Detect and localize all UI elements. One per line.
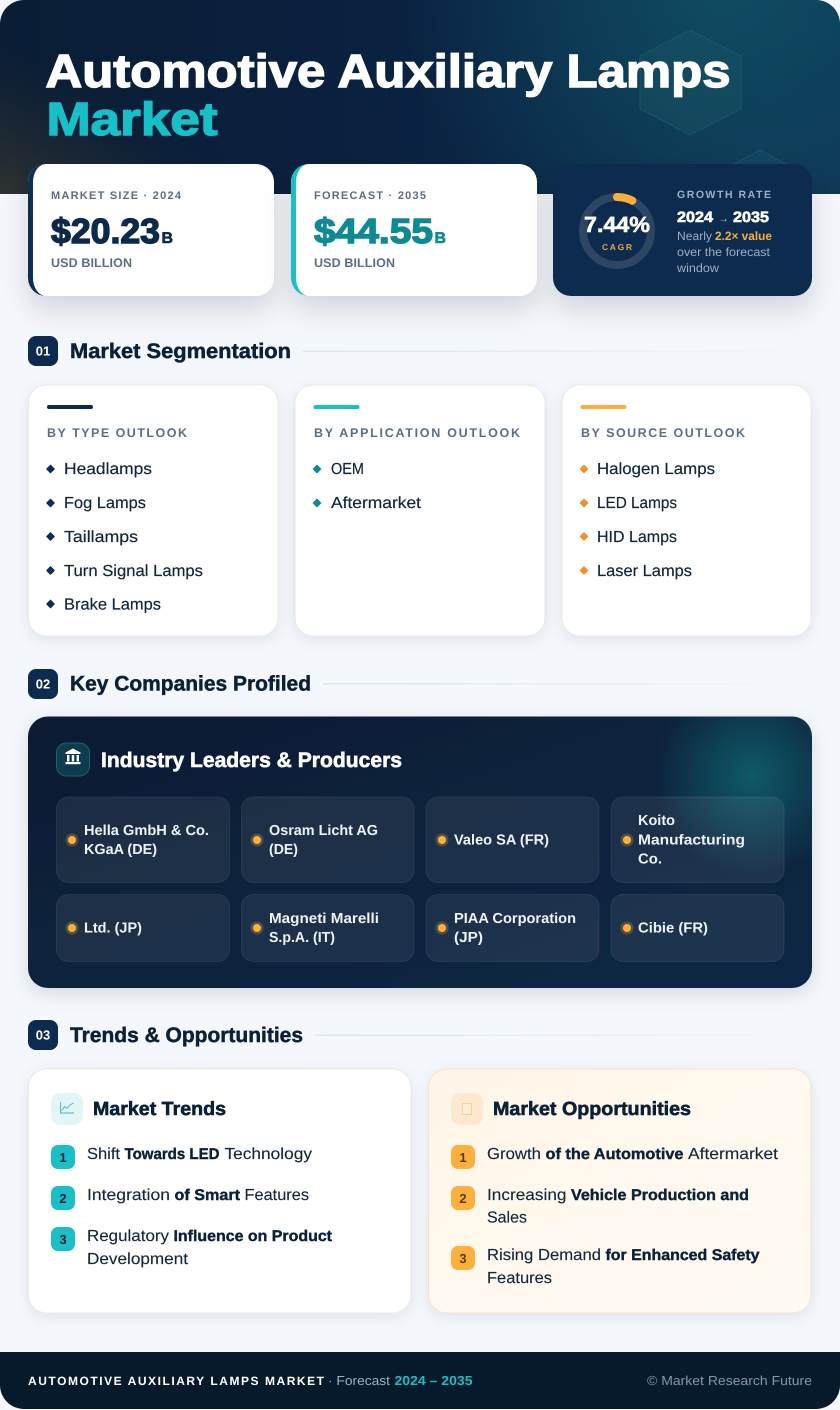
panel: by application outlook: Aftermarket [331, 495, 422, 512]
trend 1: Towards LED [124, 1146, 220, 1163]
stat card: forecast: USD BILLION [314, 256, 395, 270]
panel: market trends [28, 1069, 411, 1313]
trend 1: Technology [224, 1146, 312, 1163]
section heading 01: 01 [36, 344, 50, 358]
panel: by source outlook: Laser Lamps [597, 563, 692, 580]
section heading 02 [28, 669, 812, 699]
company: Ltd [56, 894, 230, 962]
panel: by type outlook: Fog Lamps [64, 495, 146, 512]
section heading 01 [28, 336, 812, 366]
opportunity 3: for Enhanced Safety [606, 1247, 760, 1264]
opportunity 2: Sales [487, 1210, 527, 1226]
opportunity 3 [451, 1246, 760, 1287]
panel: by application outlook: OEM [331, 461, 364, 478]
section heading 03: Trends & Opportunities [70, 1024, 303, 1047]
trend 1: 1 [59, 1150, 67, 1165]
stat card: forecast: $44.55 [314, 212, 433, 251]
stat card: market size [28, 164, 274, 296]
stat card: forecast [291, 164, 537, 296]
panel: market opportunities: Market Opportunities [493, 1099, 691, 1120]
CAGR ring: 7.44% [584, 212, 650, 237]
panel: by type outlook: Headlamps [64, 461, 152, 478]
opportunity 1: of the Automotive [546, 1146, 684, 1163]
trend 3: 3 [59, 1232, 67, 1247]
panel: by type outlook: BY TYPE OUTLOOK [47, 426, 187, 440]
stat card: market size: MARKET SIZE · 2024 [51, 190, 182, 202]
section heading 02: 02 [36, 676, 50, 692]
stat card: growth rate: 2.2× value [715, 229, 772, 243]
trend 2: Integration [87, 1187, 170, 1204]
opportunity 1: Growth [487, 1146, 541, 1163]
panel: industry leaders and producers [28, 716, 812, 988]
footer: · Forecast [328, 1373, 390, 1388]
company: Magneti Marelli: Magneti Marelli [269, 911, 379, 927]
opportunity 1 [451, 1145, 779, 1169]
stat card: growth rate: → [718, 213, 728, 225]
company: Osram: (DE) [269, 842, 298, 858]
company: Ltd: Ltd. (JP) [84, 920, 142, 936]
company: Cibie: Cibie (FR) [638, 920, 708, 936]
header banner [0, 0, 840, 194]
stat card: growth rate: GROWTH RATE [677, 189, 771, 201]
title: Market [46, 93, 218, 145]
stat card: market size: $20.23 [51, 212, 160, 251]
trend 3: Regulatory [87, 1228, 169, 1245]
panel: market trends: Market Trends [93, 1099, 226, 1120]
opportunity 1: 1 [459, 1150, 467, 1165]
stat card: growth rate: 2024 [677, 209, 714, 226]
trend 2: of Smart [174, 1187, 240, 1204]
trend 2: Features [244, 1187, 309, 1204]
stat card: growth rate [553, 164, 812, 296]
trend 2: 2 [59, 1191, 67, 1206]
hexagon decoration small [733, 150, 787, 164]
trend 2 [51, 1186, 309, 1210]
stat card: growth rate: over the forecast [677, 245, 771, 259]
title [46, 45, 730, 145]
panel: by source outlook: Halogen Lamps [597, 461, 715, 478]
panel: market opportunities [428, 1069, 811, 1313]
company: Valeo: Valeo SA (FR) [454, 832, 549, 848]
company: PIAA: PIAA Corporation [454, 911, 576, 927]
footer [0, 1352, 840, 1409]
panel: by source outlook: HID Lamps [597, 529, 677, 546]
opportunity 2 [451, 1186, 749, 1226]
stat card: growth rate: 2035 [733, 209, 769, 226]
trend 3: Development [87, 1251, 189, 1268]
stat card: forecast: FORECAST · 2035 [314, 190, 426, 202]
icon: line chart [51, 1093, 83, 1125]
company: Osram [242, 797, 414, 882]
stat card: forecast: B [434, 230, 446, 247]
opportunity 3: 3 [459, 1251, 467, 1266]
section heading 02: Key Companies Profiled [70, 672, 311, 696]
panel: by application outlook [295, 385, 545, 636]
panel: by type outlook: Taillamps [64, 529, 138, 546]
section heading 01: Market Segmentation [70, 340, 291, 363]
CAGR ring: CAGR [602, 242, 632, 252]
company: Hella: KGaA (DE) [84, 842, 157, 858]
company: Osram: Osram Licht AG [269, 823, 378, 839]
footer: © Market Research Future [647, 1373, 812, 1388]
company: Koito: Manufacturing [638, 832, 745, 848]
company: Koito: Koito [638, 813, 675, 829]
opportunity 3: Rising Demand [487, 1247, 601, 1264]
company: PIAA: (JP) [454, 930, 483, 946]
title: Automotive Auxiliary Lamps [46, 45, 730, 97]
panel: by source outlook: LED Lamps [597, 495, 677, 512]
trend 1 [51, 1145, 312, 1169]
company: Hella: Hella GmbH & Co. [84, 823, 209, 839]
company: Koito: Co. [638, 852, 662, 868]
footer: AUTOMOTIVE AUXILIARY LAMPS MARKET [28, 1374, 325, 1388]
company: PIAA [426, 894, 599, 962]
section heading 03 [28, 1020, 812, 1050]
company: Magneti Marelli [242, 894, 414, 962]
panel: by source outlook [562, 385, 811, 636]
footer: 2024 – 2035 [394, 1373, 472, 1388]
company: Magneti Marelli: S.p.A. (IT) [269, 930, 335, 946]
stat card: growth rate: window [676, 261, 719, 275]
stat card: market size: USD BILLION [51, 256, 132, 270]
company: Valeo [426, 797, 599, 882]
icon: placeholder glyph [451, 1093, 483, 1125]
company: Cibie [611, 894, 784, 962]
hexagon decoration large [640, 30, 741, 135]
CAGR ring [583, 197, 651, 265]
opportunity 1: Aftermarket [688, 1146, 779, 1163]
section heading 03: 03 [36, 1028, 50, 1042]
trend 3 [51, 1227, 332, 1268]
panel: by type outlook: Turn Signal Lamps [64, 563, 203, 580]
opportunity 2: 2 [459, 1191, 467, 1206]
icon: bank building [56, 743, 90, 776]
panel: by application outlook: BY APPLICATION OUTLOOK [314, 426, 520, 440]
company: Hella [56, 797, 230, 882]
company: Koito [611, 797, 784, 882]
panel: by type outlook: Brake Lamps [64, 596, 161, 614]
trend 3: Influence on Product [174, 1228, 332, 1245]
panel: by type outlook [28, 385, 278, 636]
stat card: market size: B [162, 230, 173, 247]
opportunity 3: Features [487, 1270, 552, 1287]
opportunity 2: Increasing [487, 1187, 566, 1204]
trend 1: Shift [87, 1146, 121, 1163]
stat card: growth rate: Nearly [677, 229, 712, 243]
panel heading: Industry Leaders & Producers [101, 749, 402, 772]
opportunity 2: Vehicle Production and [571, 1187, 749, 1204]
panel: by source outlook: BY SOURCE OUTLOOK [581, 426, 745, 440]
